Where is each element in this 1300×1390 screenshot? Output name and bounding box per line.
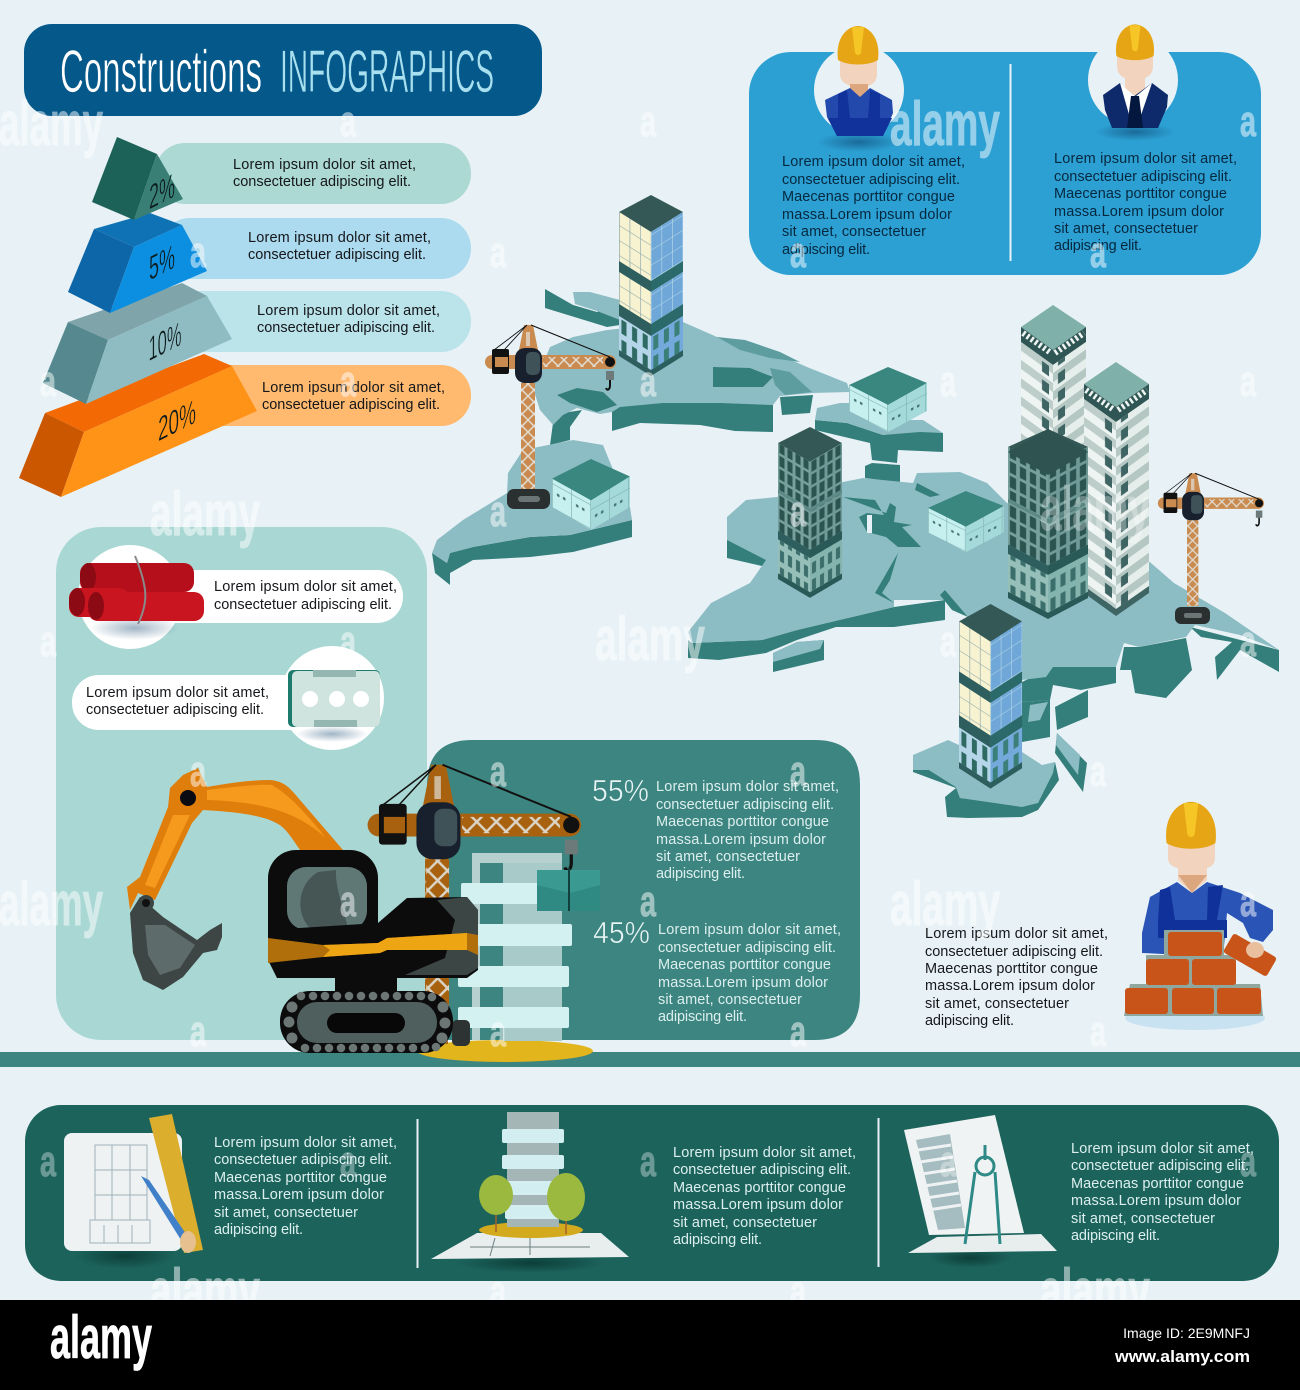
watermark overlay: a xyxy=(640,1137,656,1186)
watermark overlay: alamy xyxy=(1040,475,1150,544)
text block: bricklayer description xyxy=(925,926,1108,1029)
text block: plan step: Maecenas porttitor congue xyxy=(1071,1176,1244,1192)
watermark overlay: alamy xyxy=(890,90,1000,159)
excavator body xyxy=(268,897,478,978)
building: tower North America xyxy=(619,195,683,376)
footer bar: www.alamy.com xyxy=(1114,1347,1250,1366)
stat 45%: consectetuer adipiscing elit. xyxy=(658,940,836,956)
icon: blueprint with ruler and pencil xyxy=(64,1114,203,1269)
excavator cab xyxy=(268,850,378,977)
text block: build step xyxy=(673,1145,856,1248)
watermark overlay: a xyxy=(340,877,356,926)
icon: building on plan xyxy=(431,1112,629,1273)
title banner: INFOGRAPHICS xyxy=(280,38,494,105)
watermark overlay: a xyxy=(1240,617,1256,666)
text block: manager description: massa.Lorem ipsum dolor xyxy=(1054,204,1224,220)
caption pill 10%: Lorem ipsum dolor sit amet, xyxy=(257,303,440,319)
caption pill 20% xyxy=(190,365,471,426)
watermark overlay: a xyxy=(490,1007,506,1056)
callout: block caption xyxy=(72,646,384,750)
excavator stripe xyxy=(268,933,478,963)
watermark overlay: a xyxy=(790,1007,806,1056)
text block: worker description: consectetuer adipiscing elit. xyxy=(782,172,960,188)
watermark overlay: a xyxy=(940,357,956,406)
text block: manager description xyxy=(1054,151,1237,254)
text block: build step: massa.Lorem ipsum dolor xyxy=(673,1197,843,1213)
text block: build step: consectetuer adipiscing elit. xyxy=(673,1162,851,1178)
caption pill 5%: consectetuer adipiscing elit. xyxy=(248,247,426,263)
footer bar xyxy=(0,1300,1300,1390)
caption pill 10%: consectetuer adipiscing elit. xyxy=(257,320,435,336)
watermark overlay: a xyxy=(190,747,206,796)
text block: design step xyxy=(214,1135,397,1238)
illustration: excavator xyxy=(127,768,478,1053)
watermark overlay: a xyxy=(1240,357,1256,406)
watermark overlay: a xyxy=(790,747,806,796)
excavator arm highlight xyxy=(145,785,326,888)
watermark overlay: a xyxy=(1090,747,1106,796)
watermark overlay: a xyxy=(1090,228,1106,277)
text block: worker description: massa.Lorem ipsum dolor xyxy=(782,207,952,223)
map: Madagascar xyxy=(773,640,824,672)
stat 55%: sit amet, consectetuer xyxy=(656,849,800,865)
watermark overlay: a xyxy=(490,228,506,277)
text block: design step: sit amet, consectetuer xyxy=(214,1205,358,1221)
watermark overlay: a xyxy=(190,1007,206,1056)
watermark overlay: a xyxy=(40,617,56,666)
watermark overlay: alamy xyxy=(150,480,260,549)
panel: percentages xyxy=(427,740,860,1040)
stat 55%: Maecenas porttitor congue xyxy=(656,814,829,830)
watermark overlay: a xyxy=(190,228,206,277)
pyramid tier 2% xyxy=(92,137,183,220)
watermark overlay: alamy xyxy=(150,1257,260,1326)
text block: plan step xyxy=(1071,1141,1254,1244)
stat 45%: adipiscing elit. xyxy=(658,1009,747,1025)
map: Australia xyxy=(913,740,1059,818)
yellow ground patch xyxy=(417,1040,593,1062)
text block: manager description: Maecenas porttitor congue xyxy=(1054,186,1227,202)
watermark overlay: a xyxy=(790,1267,806,1316)
panel: bottom steps xyxy=(25,1105,1279,1281)
caption pill 5%: Lorem ipsum dolor sit amet, xyxy=(248,230,431,246)
map: Greenland xyxy=(815,403,943,463)
caption pill 2% xyxy=(155,143,471,204)
crane: Americas xyxy=(485,325,616,489)
watermark overlay: a xyxy=(490,1267,506,1316)
text block: bricklayer description: massa.Lorem ipsum dolor xyxy=(925,978,1095,994)
stat 55%: massa.Lorem ipsum dolor xyxy=(656,832,826,848)
stat 45%: Lorem ipsum dolor sit amet, xyxy=(658,922,841,938)
isometric world map xyxy=(432,195,1279,818)
pyramid tier 5%: 5% xyxy=(149,236,175,288)
cargo: green block xyxy=(537,868,600,911)
caption pill 2%: Lorem ipsum dolor sit amet, xyxy=(233,157,416,173)
watermark overlay: alamy xyxy=(890,870,1000,939)
watermark overlay: a xyxy=(790,228,806,277)
building: large dark tower xyxy=(1008,429,1088,619)
text block: design step: Maecenas porttitor congue xyxy=(214,1170,387,1186)
text block: plan step: massa.Lorem ipsum dolor xyxy=(1071,1193,1241,1209)
text block: bricklayer description: adipiscing elit. xyxy=(925,1013,1014,1029)
stat 55%: consectetuer adipiscing elit. xyxy=(656,797,834,813)
caption pill 10% xyxy=(170,291,471,352)
text block: worker description xyxy=(782,154,965,258)
excavator arm xyxy=(127,768,343,910)
text block: bricklayer description: sit amet, consectetuer xyxy=(925,996,1069,1012)
text block: manager description: consectetuer adipiscing elit. xyxy=(1054,169,1232,185)
icon: manager bust xyxy=(1088,24,1178,141)
text block: worker description: Lorem ipsum dolor sit amet, xyxy=(782,154,965,170)
panel: people profiles xyxy=(749,24,1261,275)
panel: percentage pyramid with captions xyxy=(19,137,471,497)
building: low block South America xyxy=(552,459,630,530)
watermark overlay: a xyxy=(640,877,656,926)
stat 45% xyxy=(593,915,841,1025)
crane base: Americas xyxy=(507,489,550,509)
callout: pipes caption: Lorem ipsum dolor sit amet, xyxy=(214,579,397,595)
excavator window xyxy=(287,867,367,930)
text block: plan step: consectetuer adipiscing elit. xyxy=(1071,1158,1249,1174)
text block: worker description: adipiscing elit. xyxy=(782,242,870,258)
watermark overlay: a xyxy=(340,357,356,406)
watermark overlay: a xyxy=(40,1137,56,1186)
callout: pipes caption: consectetuer adipiscing elit. xyxy=(214,597,392,613)
ground strip xyxy=(0,1052,1300,1067)
illustration: building under construction xyxy=(458,853,572,1041)
panel: materials xyxy=(56,527,427,1040)
text block: design step: adipiscing elit. xyxy=(214,1222,303,1238)
building: white tower rear xyxy=(1021,305,1086,559)
watermark overlay: a xyxy=(940,1137,956,1186)
caption pill 5% xyxy=(160,218,471,279)
watermark overlay: a xyxy=(940,617,956,666)
pyramid tier 2%: 2% xyxy=(149,165,175,217)
stat 45%: massa.Lorem ipsum dolor xyxy=(658,975,828,991)
map: North America xyxy=(533,322,850,445)
building: tower Australia xyxy=(959,604,1022,789)
stat 55% xyxy=(592,773,839,882)
watermark overlay: a xyxy=(790,487,806,536)
icon: worker bust xyxy=(814,26,904,152)
stat 55%: adipiscing elit. xyxy=(656,866,745,882)
footer bar: alamy xyxy=(50,1304,152,1371)
crane base: Asia xyxy=(1175,607,1210,624)
map: Iceland and Britain xyxy=(865,463,900,485)
map: South America xyxy=(432,440,632,585)
title banner xyxy=(24,24,542,116)
watermark overlay: a xyxy=(640,357,656,406)
map: Europe Africa Asia xyxy=(688,472,1279,702)
caption pill 2%: consectetuer adipiscing elit. xyxy=(233,174,411,190)
watermark overlay: alamy xyxy=(1040,1257,1150,1326)
icon: bricklayer xyxy=(1124,802,1277,1030)
text block: manager description: adipiscing elit. xyxy=(1054,238,1142,254)
text block: plan step: sit amet, consectetuer xyxy=(1071,1211,1215,1227)
watermark overlay: a xyxy=(340,617,356,666)
map: Indonesia islands xyxy=(1022,690,1088,792)
excavator track xyxy=(280,991,470,1053)
stat 45%: 45% xyxy=(593,915,650,950)
watermark overlay: a xyxy=(1240,877,1256,926)
text block: bricklayer description: consectetuer adipiscing elit. xyxy=(925,944,1103,960)
text block: bricklayer description: Maecenas porttitor congue xyxy=(925,961,1098,977)
stat 45%: sit amet, consectetuer xyxy=(658,992,802,1008)
text block: build step: sit amet, consectetuer xyxy=(673,1215,817,1231)
text block: manager description: Lorem ipsum dolor sit amet, xyxy=(1054,151,1237,167)
excavator pedestal xyxy=(335,975,397,995)
stat 45%: Maecenas porttitor congue xyxy=(658,957,831,973)
watermark overlay: a xyxy=(490,747,506,796)
watermark overlay: alamy xyxy=(0,90,103,159)
pyramid tier 5% xyxy=(68,213,207,313)
stat 55%: Lorem ipsum dolor sit amet, xyxy=(656,779,839,795)
watermark overlay: a xyxy=(1240,1137,1256,1186)
crane: main xyxy=(368,765,581,1044)
watermark overlay: a xyxy=(640,97,656,146)
building: white tower front xyxy=(1084,362,1149,616)
building: low block Eurasia xyxy=(928,491,1004,552)
footer bar: Image ID: 2E9MNFJ xyxy=(1123,1325,1250,1341)
watermark overlay: a xyxy=(1090,1007,1106,1056)
icon: drawing and compass xyxy=(904,1115,1057,1268)
text block: design step: consectetuer adipiscing elit. xyxy=(214,1152,392,1168)
text block: design step: Lorem ipsum dolor sit amet, xyxy=(214,1135,397,1151)
watermark overlay: a xyxy=(40,357,56,406)
caption pill 20%: Lorem ipsum dolor sit amet, xyxy=(262,380,445,396)
text block: design step: massa.Lorem ipsum dolor xyxy=(214,1187,384,1203)
stat 55%: 55% xyxy=(592,773,649,808)
pyramid tier 10% xyxy=(43,283,232,404)
caption pill 20%: consectetuer adipiscing elit. xyxy=(262,397,440,413)
excavator bucket xyxy=(130,895,222,990)
text block: plan step: adipiscing elit. xyxy=(1071,1228,1160,1244)
callout: pipes caption xyxy=(69,545,403,649)
text block: build step: Maecenas porttitor congue xyxy=(673,1180,846,1196)
text block: build step: Lorem ipsum dolor sit amet, xyxy=(673,1145,856,1161)
text block: build step: adipiscing elit. xyxy=(673,1232,762,1248)
building: dark tower Africa xyxy=(778,427,842,598)
watermark overlay: alamy xyxy=(0,870,103,939)
title banner: Constructions xyxy=(60,38,262,105)
icon: red pipes xyxy=(69,556,204,624)
watermark overlay: a xyxy=(340,1137,356,1186)
text block: worker description: sit amet, consectetuer xyxy=(782,224,926,240)
callout: block caption: Lorem ipsum dolor sit amet, xyxy=(86,685,269,701)
watermark overlay: a xyxy=(490,487,506,536)
watermark overlay: alamy xyxy=(595,605,705,674)
map: Alaska xyxy=(545,289,620,327)
text block: worker description: Maecenas porttitor congue xyxy=(782,189,955,205)
text block: bricklayer description: Lorem ipsum dolor sit amet, xyxy=(925,926,1108,942)
pyramid tier 20% xyxy=(19,354,257,497)
crane: Asia xyxy=(1158,473,1264,606)
pyramid tier 10%: 10% xyxy=(148,314,182,369)
text block: manager description: sit amet, consectetuer xyxy=(1054,221,1198,237)
callout: block caption: consectetuer adipiscing elit. xyxy=(86,702,264,718)
building: low block North America xyxy=(849,367,927,432)
text block: plan step: Lorem ipsum dolor sit amet, xyxy=(1071,1141,1254,1157)
pyramid tier 20%: 20% xyxy=(158,391,196,449)
watermark overlay: a xyxy=(340,97,356,146)
icon: concrete block xyxy=(288,670,380,727)
excavator joint xyxy=(180,790,196,806)
watermark overlay: a xyxy=(1240,97,1256,146)
